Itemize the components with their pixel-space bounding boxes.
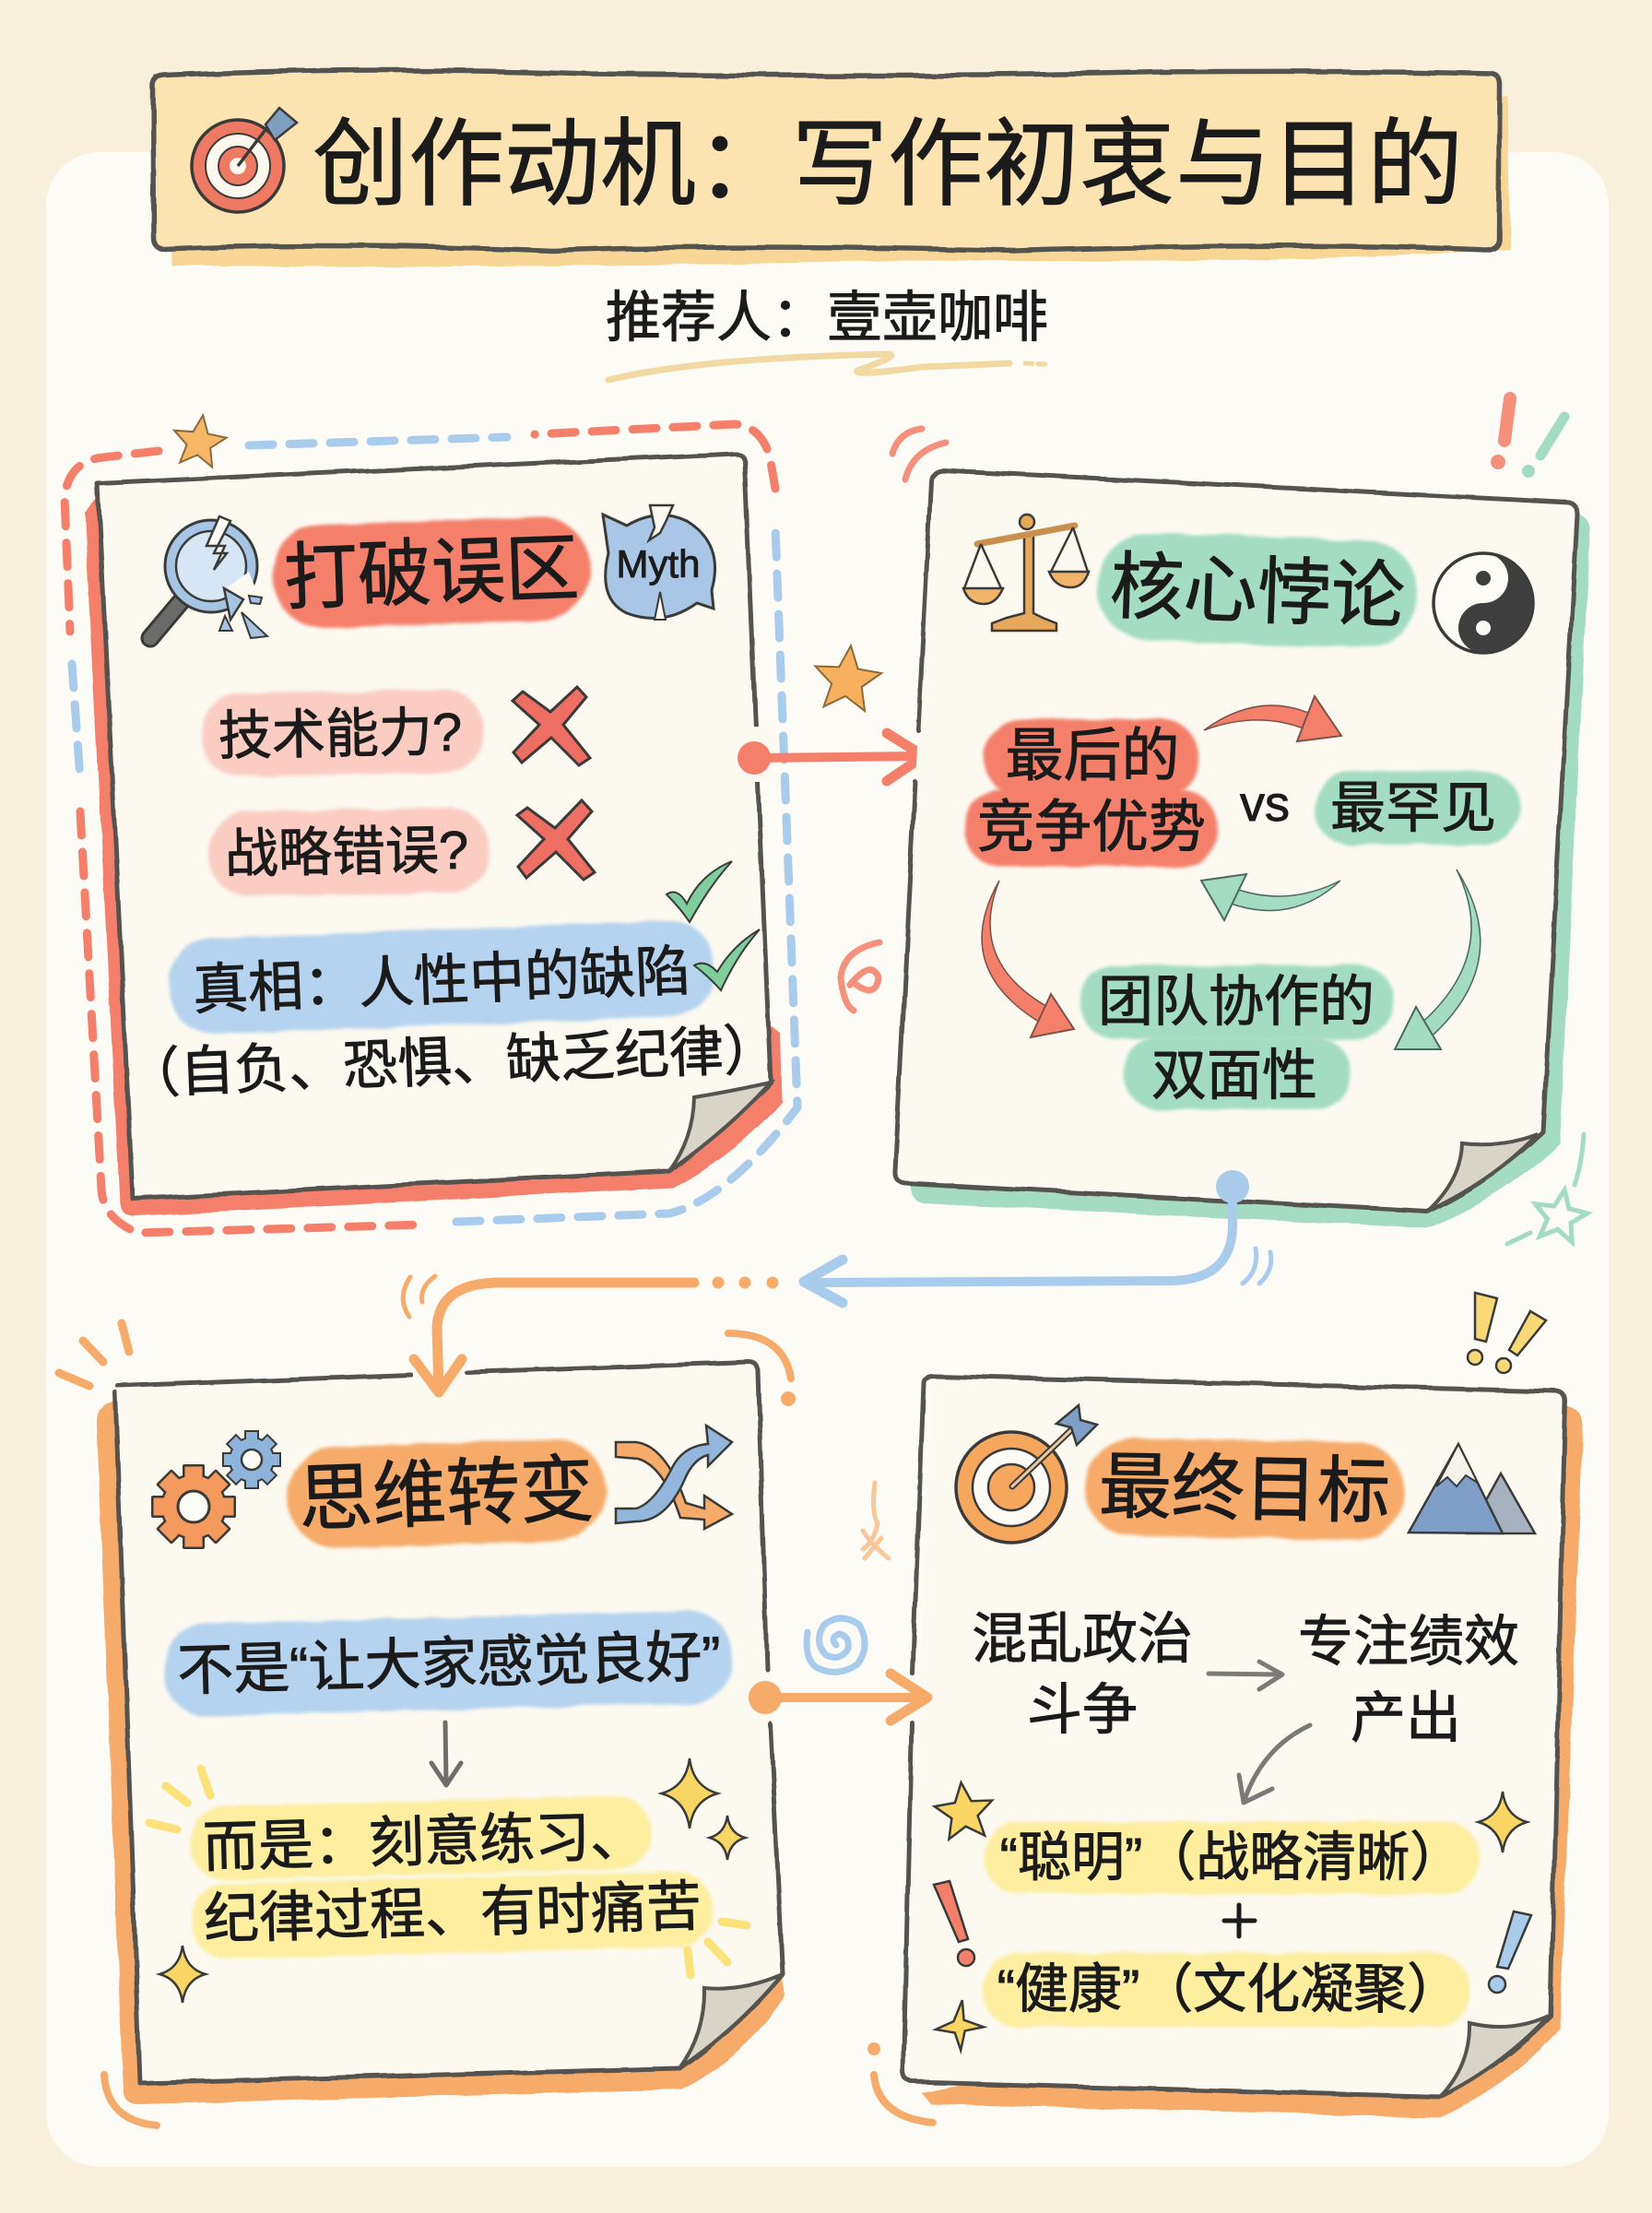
arrow: red top curve <box>1204 696 1341 741</box>
sticky note shadow <box>922 1406 1583 2117</box>
text: focused performance output <box>1298 1611 1519 1749</box>
sticky note card <box>895 470 1577 1212</box>
icon: red exclamation <box>934 1881 974 1966</box>
text: focused performance output: 专注绩效 <box>1298 1611 1519 1673</box>
icon: red cross <box>513 687 590 765</box>
text: chaotic political struggle: 混乱政治 <box>972 1608 1193 1670</box>
arrow: green back curve <box>1201 874 1340 920</box>
decoration: orange arc and dot <box>728 1333 796 1406</box>
icon: sparkle left <box>159 1946 206 2003</box>
decoration: green star outline <box>1507 1134 1590 1244</box>
icon: sparkle small <box>710 1816 745 1860</box>
item: strategic mistake: 战略错误? <box>224 821 469 884</box>
icon: scales <box>963 515 1089 631</box>
icon: green check <box>667 861 732 922</box>
yellow pill: healthy: “健康”（文化凝聚） <box>997 1959 1460 2019</box>
truth pill: 真相：人性中的缺陷 <box>192 941 691 1021</box>
decoration: red motion marks <box>892 429 946 479</box>
heading pill: 核心悖论 <box>1108 545 1406 638</box>
icon: broken myth bubble: Myth <box>616 542 701 586</box>
icon: green check <box>694 929 760 990</box>
arrow: gray curved <box>1239 1725 1310 1803</box>
decoration: yellow rays top <box>149 1769 210 1829</box>
pill: dual nature of teamwork: 团队协作的 <box>1098 971 1375 1033</box>
icon: connector star <box>811 642 884 712</box>
panel: core paradox <box>895 470 1590 1228</box>
title text: 创作动机：写作初衷与目的 <box>313 112 1463 219</box>
text: focused performance output: 产出 <box>1351 1687 1461 1749</box>
icon: crossing arrows <box>616 1426 732 1529</box>
sticky note card <box>903 1376 1565 2097</box>
icon: small gold star <box>933 1997 986 2053</box>
icon: yellow double exclamation <box>1468 1293 1546 1373</box>
panel: mindset shift <box>59 1323 796 2125</box>
pill: rarest <box>1314 771 1520 845</box>
page fold <box>1427 1134 1538 1212</box>
pill: last competitive advantage <box>964 719 1217 867</box>
panel: final goal <box>867 1293 1583 2123</box>
pill: last competitive advantage: 最后的 <box>1005 724 1180 788</box>
decoration: exclamation marks red and green <box>1491 398 1564 478</box>
pill: dual nature of teamwork: 双面性 <box>1151 1045 1317 1106</box>
page fold <box>1440 2016 1549 2097</box>
decoration: red squiggle <box>841 942 879 1011</box>
icon: sparkle large <box>662 1758 717 1828</box>
decoration: orange dot and curve <box>867 2042 933 2123</box>
blue statement pill: 不是“让大家感觉良好” <box>176 1625 722 1702</box>
arrow: red down curve <box>982 881 1074 1037</box>
title banner <box>153 70 1510 266</box>
decoration: orange ray marks <box>59 1323 129 1386</box>
sticky note card <box>115 1362 783 2083</box>
pill: dual nature of teamwork <box>1080 965 1394 1109</box>
connector arrow: mindset to goal <box>749 1674 927 1721</box>
pill: last competitive advantage: 竞争优势 <box>977 796 1206 859</box>
icon: title target <box>192 108 297 212</box>
icon: star <box>170 411 229 468</box>
arrow: gray right <box>1209 1662 1282 1689</box>
sticky note shadow <box>85 498 782 1216</box>
yellow statement pills: 纪律过程、有时痛苦 <box>203 1876 702 1950</box>
versus label: vs <box>1240 776 1290 832</box>
icon: yin yang <box>1434 553 1533 653</box>
yellow statement pills: 而是：刻意练习、 <box>202 1805 646 1878</box>
pill: rarest: 最罕见 <box>1330 777 1496 839</box>
connector arrow: paradox to mindset blue <box>804 1170 1271 1303</box>
truth detail text: （自负、恐惧、缺乏纪律） <box>124 1019 779 1106</box>
sticky note shadow <box>97 1402 785 2104</box>
item: technical ability <box>200 689 484 777</box>
item: strategic mistake <box>207 807 490 897</box>
heading pill: 思维转变 <box>298 1448 596 1541</box>
decoration: yellow rays bottom <box>688 1922 747 1975</box>
decoration: orange corner curve <box>104 2075 157 2125</box>
sticky note shadow <box>911 513 1590 1228</box>
decoration: orange squiggle <box>863 1483 889 1558</box>
subtitle recommender: 推荐人：壹壶咖啡 <box>606 287 1048 349</box>
page fold <box>669 1083 771 1171</box>
page fold <box>679 1974 783 2068</box>
item: technical ability: 技术能力? <box>218 703 463 766</box>
dashed frame <box>65 424 797 1233</box>
panel: break myths <box>65 411 797 1233</box>
blue statement pill <box>163 1610 733 1717</box>
heading pill: 最终目标 <box>1098 1445 1391 1533</box>
icon: broken myth bubble <box>603 505 715 620</box>
sticky note card <box>98 454 771 1199</box>
truth pill <box>168 919 715 1035</box>
icon: blue exclamation <box>1489 1911 1531 1993</box>
text: chaotic political struggle: 斗争 <box>1027 1679 1138 1741</box>
icon: gold sparkle <box>1479 1792 1527 1852</box>
icon: target with arrow <box>956 1405 1097 1543</box>
icon: mountains <box>1409 1444 1535 1533</box>
connector arrow: myths to paradox <box>738 727 924 782</box>
icon: cracked magnifier <box>150 516 267 638</box>
heading pill: 打破误区 <box>283 527 581 620</box>
icon: gold star <box>932 1780 996 1840</box>
arrow: gray down <box>431 1722 461 1785</box>
decoration: blue spiral <box>807 1618 865 1672</box>
icon: red cross <box>517 800 595 880</box>
text: chaotic political struggle <box>972 1608 1193 1741</box>
plus sign <box>1224 1905 1255 1936</box>
subtitle recommender <box>606 287 1048 380</box>
yellow pill: smart: “聪明”（战略清晰） <box>1000 1828 1463 1888</box>
yellow statement pills <box>189 1794 713 1959</box>
arrow: green down curve <box>1395 870 1481 1049</box>
icon: gears <box>151 1430 281 1549</box>
connector arrow: to mindset orange <box>403 1276 778 1392</box>
